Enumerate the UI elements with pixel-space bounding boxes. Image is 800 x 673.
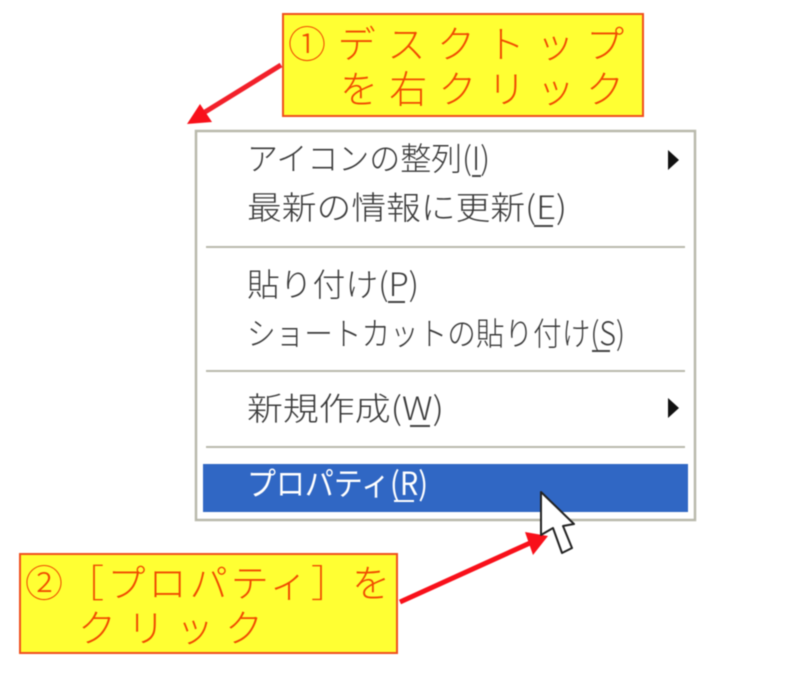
- callout 1: right-click the desktop: を右クリック: [340, 59, 624, 114]
- menu item: paste shortcut: ショートカットの貼り付け(S): [247, 309, 625, 355]
- highlighted menu item: properties: [203, 459, 688, 512]
- menu item: paste: 貼り付け(P): [247, 260, 419, 306]
- callout 2: click properties: ②［プロパティ］を: [25, 553, 390, 608]
- callout 2: click properties: クリック: [78, 598, 263, 653]
- callout 1: right-click the desktop: ①デスクトップ: [288, 14, 624, 69]
- menu item: refresh: 最新の情報に更新(E): [247, 183, 567, 229]
- callout 1: right-click the desktop: [283, 14, 643, 116]
- context menu panel: [196, 131, 695, 520]
- callout 2: click properties: [20, 553, 397, 653]
- arrow to cursor: [400, 532, 548, 602]
- icon: mouse cursor: [541, 492, 574, 553]
- highlighted menu item: properties: プロパティ(R): [247, 459, 428, 505]
- arrow from callout 1: [187, 65, 281, 124]
- menu submenu arrow: [668, 150, 679, 170]
- menu submenu arrow: [668, 398, 679, 418]
- menu item: arrange icons: アイコンの整列(I): [247, 134, 490, 180]
- menu item: new: 新規作成(W): [247, 384, 444, 430]
